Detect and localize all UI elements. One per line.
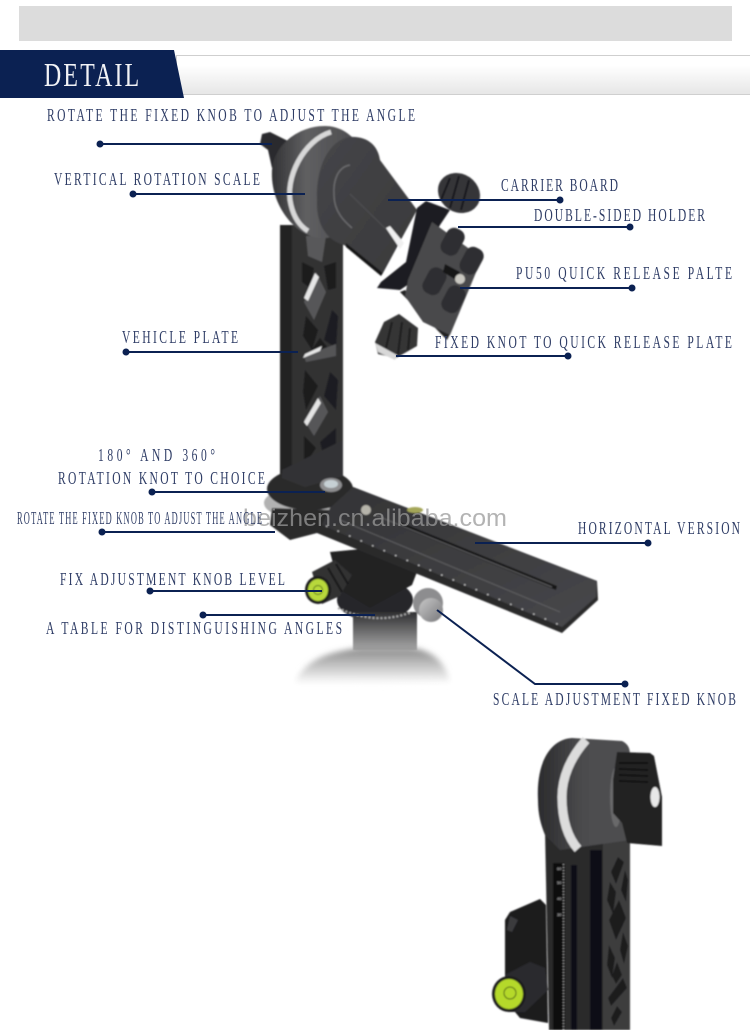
head cylinder (272, 126, 370, 238)
photo: panoramic head, side view: 30 (557, 912, 562, 917)
label: a table for distinguishing angles (46, 612, 375, 639)
label: fixed knot to quick release plate: FIXED KNOT TO QUICK RELEASE PLATE (435, 334, 732, 353)
label: vehicle plate: VEHICLE PLATE (122, 329, 238, 348)
tripod fade (296, 648, 450, 684)
rear stud (260, 132, 290, 168)
silver adjustment knob (413, 588, 443, 622)
side scale band (562, 740, 586, 849)
photo: panoramic head, side view: 50 (557, 880, 562, 885)
label: carrier board: CARRIER BOARD (501, 177, 618, 196)
side green level knob (492, 962, 548, 1012)
label: fix adjustment knob level: FIX ADJUSTMENT KNOB LEVEL (60, 571, 285, 590)
label: rotate the fixed knob, condensed: ROTATE THE FIXED KNOB TO ADJUST THE ANGLE (17, 509, 262, 528)
label: vertical rotation scale (54, 171, 305, 198)
heading: detail banner (0, 50, 750, 98)
label: horizontal version: HORIZONTAL VERSION (578, 520, 740, 539)
label: scale adjustment fixed knob: SCALE ADJUSTMENT FIXED KNOB (493, 691, 736, 710)
label: horizontal version (475, 520, 740, 546)
side head cylinder (538, 738, 630, 850)
label: 180 and 360 rotation knot: ROTATION KNOT TO CHOICE (58, 470, 265, 489)
label: fix adjustment knob level (60, 571, 322, 594)
label: double-sided holder (458, 207, 705, 230)
label: a table for distinguishing angles: A TABLE FOR DISTINGUISHING ANGLES (46, 620, 342, 639)
arm slot (386, 226, 404, 249)
watermark: beizhen.cn.alibaba.com (243, 505, 507, 532)
label: vehicle plate (122, 329, 298, 356)
rotation base disk (264, 440, 353, 520)
top grey bar (19, 6, 732, 41)
photo: panoramic head, side view: 40 (557, 896, 562, 901)
side arm lattice (603, 835, 630, 1030)
photo: panoramic head, main view (260, 126, 598, 684)
label: 180 and 360 rotation knot: 180° AND 360° (98, 447, 215, 466)
side arm (545, 830, 630, 1030)
top knob (430, 165, 488, 221)
heading: detail banner: DETAIL (44, 57, 139, 94)
label: double-sided holder: DOUBLE-SIDED HOLDER (534, 207, 705, 226)
green level knob (305, 560, 352, 604)
label: rotate the fixed knob to adjust the angle: ROTATE THE FIXED KNOB TO ADJUST THE ANGLE (47, 107, 415, 126)
vertical arm (280, 225, 343, 480)
label: pu50 quick release palte: PU50 QUICK RELEASE PALTE (516, 265, 732, 284)
under clamp and rotating base (330, 548, 420, 650)
label: vertical rotation scale: VERTICAL ROTATION SCALE (54, 171, 260, 190)
label: rotate the fixed knob to adjust the angle (47, 107, 415, 148)
bottom knob (375, 314, 418, 360)
quick release plate (405, 222, 487, 335)
clamp body (377, 201, 450, 290)
label: pu50 quick release palte (460, 265, 732, 292)
label: 180 and 360 rotation knot (58, 447, 325, 496)
rotation scale band (290, 132, 331, 231)
photo: panoramic head, side view (492, 738, 662, 1030)
photo: panoramic head, side view: 60 (557, 866, 562, 871)
label: scale adjustment fixed knob (437, 610, 736, 710)
label: fixed knot to quick release plate (396, 334, 732, 360)
label: carrier board (388, 177, 618, 204)
horizontal plate (270, 487, 598, 633)
side clamp block (505, 899, 548, 1023)
side head knob (610, 752, 662, 846)
label: rotate the fixed knob, condensed (17, 509, 275, 536)
front plate (317, 137, 417, 273)
